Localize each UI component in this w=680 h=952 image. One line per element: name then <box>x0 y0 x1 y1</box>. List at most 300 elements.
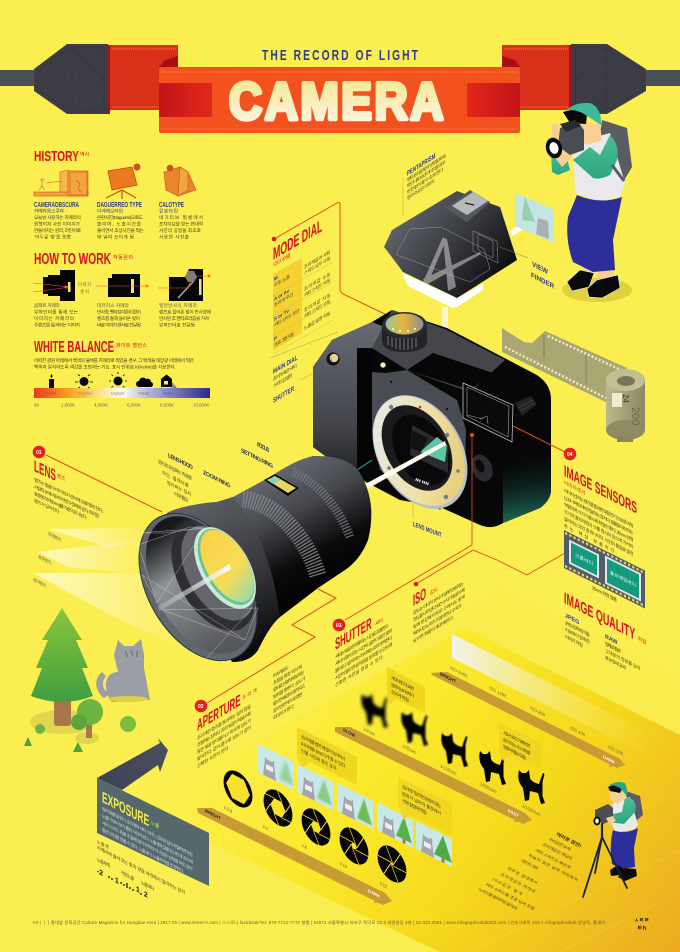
icons: light sources <box>49 372 177 390</box>
body text: 조절하는 장치다. 조리개 값이 작을수록 <box>197 709 251 749</box>
first tip: 사진의 기본 <box>519 857 540 872</box>
pants <box>611 828 638 869</box>
panel: white balance: 화이트 밸런스 <box>116 342 147 349</box>
zoom ring: ZOOM RING <box>203 470 231 490</box>
text: daguerreotype: DAGUERREO TYPE <box>97 200 142 209</box>
colour temperature bar: Shade <box>163 392 173 396</box>
body text: 달라지는 요인 중 하나이다. 사진의 품질을 결정 <box>564 515 633 558</box>
colour temperature bar <box>34 388 210 398</box>
colour temperature bar: Tungsten <box>77 392 92 396</box>
panel: shutter <box>333 614 393 689</box>
publisher logo: ㅌh <box>637 926 647 932</box>
title: CAMERA <box>229 73 446 131</box>
light rays into lens <box>33 528 176 645</box>
f number labels: F8 <box>302 843 307 851</box>
body text <box>564 487 634 558</box>
table left column <box>274 272 300 349</box>
callout: deep depth: 조리개가 닫히면 초점이 맞는 <box>402 783 442 811</box>
colour temperature bar: Cloudy <box>138 392 149 396</box>
panel: image quality: 화질 <box>638 635 647 646</box>
shoes <box>567 270 620 298</box>
label: pentaprism: 펜타프리즘 빛의 방향을 바꿔 <box>407 152 446 184</box>
second tip: ISO값은 높게 <box>491 876 524 897</box>
text: how to work: 이미지는 카메라의 <box>34 315 74 322</box>
callout: fast shutter: 멈추어 찍을 수 있음 <box>503 743 527 762</box>
body text: 좋은 사진을 얻을 수 있다. 노출과다, 노출부족을 조정한다. <box>102 826 184 875</box>
pentaprism block <box>384 190 554 308</box>
arrow <box>97 738 168 790</box>
hood section <box>167 497 280 662</box>
bright to dark arrow <box>197 808 392 905</box>
body text: 렌즈는 빛을 모아 이미지 센서에 상을 맺게 한다. <box>34 476 103 515</box>
colour temperature bar: Candle <box>45 392 56 396</box>
exposure scale: 1 <box>115 875 119 886</box>
panel: lens: 렌즈 <box>57 472 66 483</box>
badge <box>564 448 576 460</box>
iso labels: ISO 200 <box>608 744 623 757</box>
exposure scale: 1 <box>136 884 140 895</box>
backpack <box>597 120 632 182</box>
inner prism wireframe <box>397 227 498 282</box>
sensor size film graphic <box>564 530 645 608</box>
slow to fast arrow <box>335 727 532 824</box>
body text: 역할이며 크기가 클수록 화질이 좋다. 35mm 판형 <box>564 501 633 544</box>
text: calotype: 네거티브 필름에서 <box>159 214 203 221</box>
panel: shutter: 셔터 <box>375 616 383 628</box>
sensor size film graphic: 크롭바디 <box>575 552 593 567</box>
body text: 조리개란 렌즈를 통과하는 빛의 양을 <box>197 702 251 742</box>
callout: slow shutter: 흐리게 찍힘 <box>391 688 409 704</box>
table right column: 조리개값 자동 <box>304 291 331 314</box>
text: how to work: 주렌즈를 통과하는 이미지 <box>34 322 80 328</box>
pants <box>567 195 622 272</box>
panel: iso <box>413 580 466 645</box>
shoes <box>610 865 637 881</box>
small bushes <box>24 699 136 752</box>
lens hood: 이미지 향상 <box>174 490 189 505</box>
callout: deep depth: 선명 촬영에 적합 <box>402 797 428 817</box>
grip <box>313 322 392 472</box>
raw block: 그대로의 정보를 담아 <box>605 647 641 673</box>
strap <box>612 165 624 181</box>
heading: SHUTTER <box>335 614 372 654</box>
label: view finder: FINDER <box>531 272 554 291</box>
heading: LENS <box>34 458 56 485</box>
publisher logo <box>634 918 649 932</box>
table right column: 셔터 스피드 수동 <box>304 297 331 320</box>
heading: WHITE BALANCE <box>34 339 114 356</box>
body text: 하는 핵심 부품이다. <box>564 522 617 557</box>
body text: 낮으면 화질이 깨끗해진다 <box>413 614 454 645</box>
silhouette <box>313 310 551 527</box>
label: main dial: 스피드 값 설정 <box>273 372 292 390</box>
panel: white balance <box>34 339 210 408</box>
f22 <box>378 839 406 889</box>
body text: 선명한 사진이 된다 <box>197 744 229 770</box>
text: how to work: 반사된 후 펜타프리즘을 거쳐 <box>159 315 209 322</box>
body text: 시간이 짧으면 움직임을 포착할 수 있으며 <box>335 641 392 682</box>
table right column: 조리개값 수동 <box>304 270 331 293</box>
aperture blades <box>197 764 406 905</box>
table left column: 조리개 우선 <box>274 291 293 309</box>
jpeg block <box>565 613 591 649</box>
iso brightness band <box>431 634 660 768</box>
prism body <box>384 191 517 298</box>
film strip <box>502 328 627 403</box>
table left column: 수동 노출 <box>274 272 290 289</box>
tripod <box>583 824 627 897</box>
text: calotype: 포지티브를 얻는 현대적 <box>159 220 203 228</box>
badge: 03 <box>336 623 342 629</box>
heading: IMAGE QUALITY <box>564 590 635 644</box>
callout: deep depth: 범위가 넓어져 풍경에서 <box>402 790 441 817</box>
body text: 빛에 민감해 어두운 곳에서도 밝게 <box>413 593 465 631</box>
table left column: A or Av <box>274 288 289 303</box>
body text column 2: 얕으면 배경이 흐려지고, <box>273 682 305 708</box>
pine <box>31 608 93 702</box>
iso labels: ISO 400 <box>570 725 585 738</box>
cap <box>608 782 627 796</box>
callout: slow shutter <box>387 667 425 713</box>
label: pentaprism <box>403 152 446 216</box>
scale labels: 4,000K <box>94 402 108 408</box>
scale labels: 8,000K <box>160 402 174 408</box>
distance window <box>264 474 299 496</box>
text: daguerreotype: 다게레오타입 <box>97 208 123 214</box>
lens hood: LENS HOOD <box>168 453 194 472</box>
text: calotype: CALOTYPE <box>159 200 184 209</box>
bright to dark arrow <box>431 671 626 768</box>
description: 백색과 일치하도록 색감을 조정하는 기능. 표시 단위로 K(Kelvin)를 사용한다. <box>34 364 176 370</box>
f16 <box>340 821 368 871</box>
body text: 셔터가 열려 있는 시간이 길면 더 많은 빛이 <box>335 627 392 668</box>
exposure meter note: 적정노출 <box>121 869 135 883</box>
body text column 2: 초점을 맞춘 피사체 <box>273 663 302 687</box>
text: camera obscura: 만들어지는 원리, 라틴어로 <box>34 227 82 234</box>
panel: image quality <box>564 590 647 673</box>
text: how to work: 바로 이미지 센서로 전달됨 <box>97 322 141 328</box>
film canister <box>606 369 645 442</box>
text: calotype: 사진의 공정을 최초로 <box>159 227 202 234</box>
aperture photo sequence <box>258 744 452 867</box>
icon: compact camera diagram <box>33 270 75 301</box>
panel: exposure: 노출 <box>151 819 160 830</box>
photo f8 <box>337 783 373 829</box>
label: view finder: VIEW <box>532 261 548 276</box>
camera body <box>313 310 551 527</box>
light beam to prism <box>442 307 448 392</box>
focus setting ring: SETTING RING <box>241 448 273 470</box>
speed labels: 1/30sec <box>402 743 417 756</box>
head <box>609 787 627 804</box>
second tip <box>477 865 539 912</box>
heading: APERTURE <box>197 691 241 735</box>
lens hood: 차단, 플레어를 <box>162 469 189 490</box>
text: how to work: 반사경, 펜타프리즘이 없어 <box>97 308 141 316</box>
right strap pad <box>571 44 646 114</box>
header strap ribbon <box>0 44 680 133</box>
f4 <box>264 783 292 833</box>
sublabel: 감도 <box>430 585 438 597</box>
hair <box>608 785 622 793</box>
callout: slow shutter: 움직이는 피사체가 <box>391 681 415 700</box>
panel: image sensors: 이미지센서 <box>564 479 585 497</box>
text: how to work: 뷰파인더를 통해 보는 <box>34 308 79 316</box>
body text column 2: 범위를 뜻한다. 심도가 <box>273 674 306 701</box>
panel: how to work <box>33 251 211 328</box>
exposure scale <box>97 866 148 900</box>
ground <box>30 710 99 744</box>
body text: 사람의 눈에 비유하자면 수정체와 같다. 화각은 <box>34 483 100 521</box>
text: camera obscura <box>34 200 82 240</box>
colour temperature bar: Daylight <box>111 392 124 396</box>
ribbed focus ring <box>293 472 350 538</box>
strap bars <box>0 70 680 86</box>
body text: 셔터는 빛을 받아들이는 시간을 조절한다. <box>335 622 389 661</box>
callout: deep depth <box>398 777 452 835</box>
lens mount ring: ▮▮▮ ▮▮▮▮ <box>415 477 430 486</box>
publisher logo: ㅅㅌㄹ <box>634 918 649 924</box>
hood interior <box>124 498 276 672</box>
table right column: 노출값 설정 자동 <box>304 309 331 332</box>
panel: aperture <box>195 589 336 770</box>
speed labels <box>363 726 541 818</box>
callout: shallow depth: 조리개를 열면 배경이 흐려져서 <box>301 733 345 763</box>
description: 어떠한 광원 아래에서 백색의 물체를 카메라로 찍었을 경우, 그 백색을 태양광 아래에서 찍은 <box>34 357 195 364</box>
body text: 노출이 되어 보기 좋은 사진이 된다. 노출계의 값을 참고한 후 조리개 <box>102 812 193 866</box>
first tip: 하늘이 밝은 날의 야외에서 <box>527 852 579 883</box>
exposure scale: -2 <box>97 866 103 878</box>
f8 <box>302 802 330 852</box>
panel: lens <box>33 446 162 522</box>
grip button <box>326 352 340 366</box>
table right column: 스피드 모두 수동 <box>304 254 331 277</box>
top plate <box>372 310 505 392</box>
pointer line <box>500 247 528 258</box>
footer credits: ㄹ0ㅣㅣ | 홍대앞 문화공간 Culture Magazine for Hongdae Area | 2017.05 | www.street-h.com | 스스로나 facebook/Tel. 070-7713-7772 발행 | 04071 서울특별시 마포구 독막로 12-3 대명빌딩 3층 | 02-323-2561 | www.infographicslab203.com | 인포그래픽 203 × infographicslab 양영욱, 홍세미 <box>32 919 605 926</box>
label: main dial: MAIN DIAL <box>273 354 298 376</box>
shirt <box>611 797 638 832</box>
label: pentaprism: 렌즈와 같은 이미지 <box>407 177 435 202</box>
rear arm <box>573 135 618 179</box>
focus setting ring: FOCUS <box>257 442 269 454</box>
subtitle: THE RECORD OF LIGHT <box>262 47 420 64</box>
second tip: 조리개값은 최대로 <box>499 871 537 895</box>
callout: fast shutter: 셔터스피드가 빠르면 <box>503 729 531 750</box>
table left column: M <box>274 275 278 283</box>
icon: mirrorless camera diagram <box>96 274 149 297</box>
raw block: RAW <box>605 634 618 647</box>
text: calotype <box>159 200 203 240</box>
text: how to work: 렌즈를 통해 들어온 빛이 <box>97 315 140 322</box>
body text <box>413 580 466 645</box>
body text: 들어오고 움직이는 피사체는 흐리게 찍힌다. <box>335 634 393 675</box>
camera <box>544 120 584 160</box>
rear screen <box>463 383 513 442</box>
left red strap <box>108 45 178 114</box>
slow to fast arrow: SLOW <box>343 727 356 739</box>
label: main dial: 조리개 혹은 셔터 <box>273 362 297 383</box>
white light beam <box>158 564 231 611</box>
text: how to work <box>34 302 211 328</box>
jpeg block: JPEG 압축 방식을 <box>565 619 591 639</box>
labels: lens parts <box>158 442 273 505</box>
labels: focal lengths: 망원렌즈 <box>48 530 61 543</box>
body text column 2 <box>273 663 306 722</box>
text: how to work: 일안반사식 카메라 <box>159 302 198 309</box>
jpeg block: JPEG <box>565 613 580 627</box>
description <box>34 357 195 370</box>
badge <box>195 700 207 712</box>
table right column: 조리개값과 셔터 <box>304 248 330 271</box>
body text <box>197 702 251 770</box>
table left column: P <box>274 335 277 343</box>
film canister: 200 <box>629 407 641 425</box>
body text: 얕아진다. 값이 클수록 심도가 깊어 <box>197 724 251 763</box>
table right column <box>304 248 331 332</box>
exposure meter note: 노출과다 <box>141 879 155 893</box>
barrel <box>167 456 371 662</box>
panel: mode dial: 모드 다이얼 <box>273 251 291 269</box>
ankles <box>583 262 614 278</box>
photo f2.8 <box>258 744 294 790</box>
label: lens mount <box>413 503 442 539</box>
text: camera obscura: 카메라옵스쿠라 <box>34 208 65 214</box>
body text: 셔터 스피드 등을 조절해 빛이 부족하거나 많은 상태를 바로 잡아 <box>102 819 194 873</box>
body text: 감도는 이미지 센서가 빛에 반응하는 <box>413 580 464 617</box>
badge: 01 <box>36 450 42 456</box>
text: calotype: 사용한 사진술 <box>159 234 190 240</box>
second tip: 노이즈를 줄이려면 삼각대 <box>477 886 519 911</box>
viewfinder image <box>515 193 553 243</box>
panel: history <box>34 148 203 240</box>
text: daguerreotype <box>97 200 145 240</box>
shutter speed sequence <box>335 694 545 824</box>
labels: focal lengths: 광각렌즈 <box>33 576 46 590</box>
leader: image sensors <box>513 426 565 452</box>
heading: HOW TO WORK <box>34 251 111 268</box>
body text: 찍히지만 노이즈가 많아진다. 수치가 <box>413 602 462 638</box>
mirror box <box>410 425 448 473</box>
text: camera obscura: CAMERAOBSCURA <box>34 200 79 209</box>
text block: shooting tips: 여러분 잠깐! <box>555 831 583 849</box>
label: shutter: SHUTTER <box>273 386 294 405</box>
scale labels: 0K <box>34 402 39 408</box>
hot shoe <box>445 190 490 222</box>
bright to dark arrow: BRIGHT <box>440 671 457 685</box>
bright to dark arrow: BRIGHT <box>205 808 222 822</box>
table left column: 셔터 스피드 우선 <box>274 307 300 329</box>
callout: shallow depth <box>297 727 357 785</box>
f number labels: F2.8 <box>224 805 233 814</box>
lens glass <box>181 517 269 619</box>
camera <box>594 804 616 826</box>
white underside <box>402 273 483 308</box>
front rim <box>115 493 281 681</box>
panel: aperture: 조리개 <box>242 686 257 702</box>
label: pentaprism: 파인더로 보낸 이미지를 좌우 <box>407 158 446 190</box>
light path through prism <box>423 237 481 291</box>
callout: fast shutter <box>499 723 542 770</box>
body text: 빛의 양을 말 한다. 조리개와 셔터 스피드, 감도의 값이 적절하면 적정 <box>102 805 193 859</box>
body text: 많은 빛을 받아들이고 피사계 심도가 <box>197 716 251 756</box>
panel: history: 역사 <box>80 151 90 158</box>
callout: fast shutter: 움직이는 피사체를 <box>503 736 531 758</box>
body text: 크기의 풀프레임과 크롭 방식이 있으며 가격이 <box>564 508 633 551</box>
f number labels: F16 <box>340 861 347 870</box>
icon: camera obscura <box>34 170 88 196</box>
panel: iso: ISO <box>413 584 426 610</box>
text: daguerreotype: 줄이면서 초상사진을 찍는 <box>97 227 145 234</box>
angle of view wireframe <box>138 527 258 660</box>
table stripe <box>273 258 302 351</box>
mount screws <box>387 405 460 499</box>
bright to dark arrow: DARK <box>603 754 615 765</box>
text: how to work: 렌즈로 들어온 빛이 반사경에 <box>159 308 211 316</box>
text: how to work: 미러리스 카메라 <box>97 302 130 309</box>
wheel and lug <box>467 396 537 485</box>
text: camera obscura: 오늘날 사용하는 카메라의 <box>34 214 81 221</box>
text block: shooting tips <box>477 831 583 912</box>
body text column 2: 앞뒤로 선명하게 보이는 <box>273 668 305 694</box>
panel <box>97 778 209 886</box>
leader line <box>207 589 336 703</box>
labels: focal lengths: 표준렌즈 <box>38 553 51 566</box>
body text: 이미지 센서는 렌즈를 통과한 빛을 전기 신호로 바꿔 <box>564 487 633 530</box>
backpack <box>625 791 643 820</box>
label: pentaprism: PENTAPRISM <box>407 153 435 178</box>
text: daguerreotype: 데 널리 쓰이게 됨 <box>97 234 134 240</box>
panel: how to work: 작동원리 <box>113 254 133 261</box>
photo f4 <box>297 764 333 810</box>
slow to fast arrow: FAST <box>508 808 520 819</box>
body text: 표준렌즈(약 50mm)를 기준으로 나눈다 <box>34 490 87 522</box>
film strip and canister <box>502 328 645 442</box>
text: daguerreotype: 은판사진(Daguerre)으로도 <box>97 214 144 221</box>
icon: daguerreotype camera <box>106 164 140 199</box>
label: pentaprism: 반전 없이 볼 수 있게 한다 <box>407 166 444 196</box>
table left column: 프로그램 자동 <box>274 330 295 349</box>
panel: image sensors <box>564 448 645 608</box>
raw block <box>605 634 641 673</box>
callout: shallow depth: 피사체를 돋보이게 할 수 있다 <box>301 740 346 770</box>
bright to dark arrow: DARK <box>368 888 380 899</box>
speed labels: 1/4sec <box>363 726 376 738</box>
heading: HISTORY <box>34 148 79 165</box>
callout: shallow depth: 인물 사진에 좋은 효과 <box>301 747 337 773</box>
leader line <box>274 202 389 316</box>
photo f22 <box>416 821 452 867</box>
head <box>576 122 602 145</box>
lens hood: 방지하는 장치 <box>167 479 191 498</box>
table left column: S or Tv <box>274 308 289 323</box>
sleeves <box>608 797 636 824</box>
mount plate <box>372 370 466 510</box>
jpeg block: 이용하여 압축한 <box>565 626 591 646</box>
camera lens <box>115 456 371 681</box>
illustration: photographer with tripod <box>583 782 643 897</box>
second tip: 어두운 실내에서 <box>506 865 539 886</box>
jpeg block: 이미지 파일 <box>565 633 583 649</box>
exposure scale: 2 <box>144 889 148 900</box>
photo f16 <box>377 802 413 848</box>
body text <box>335 622 393 689</box>
red eye lamp <box>380 362 386 368</box>
f2.8 <box>224 764 252 814</box>
illustration: photographer top <box>544 103 632 302</box>
text: calotype: 칼로타입 <box>159 208 178 214</box>
table right column: 셔터 스피드 자동 <box>304 276 331 299</box>
